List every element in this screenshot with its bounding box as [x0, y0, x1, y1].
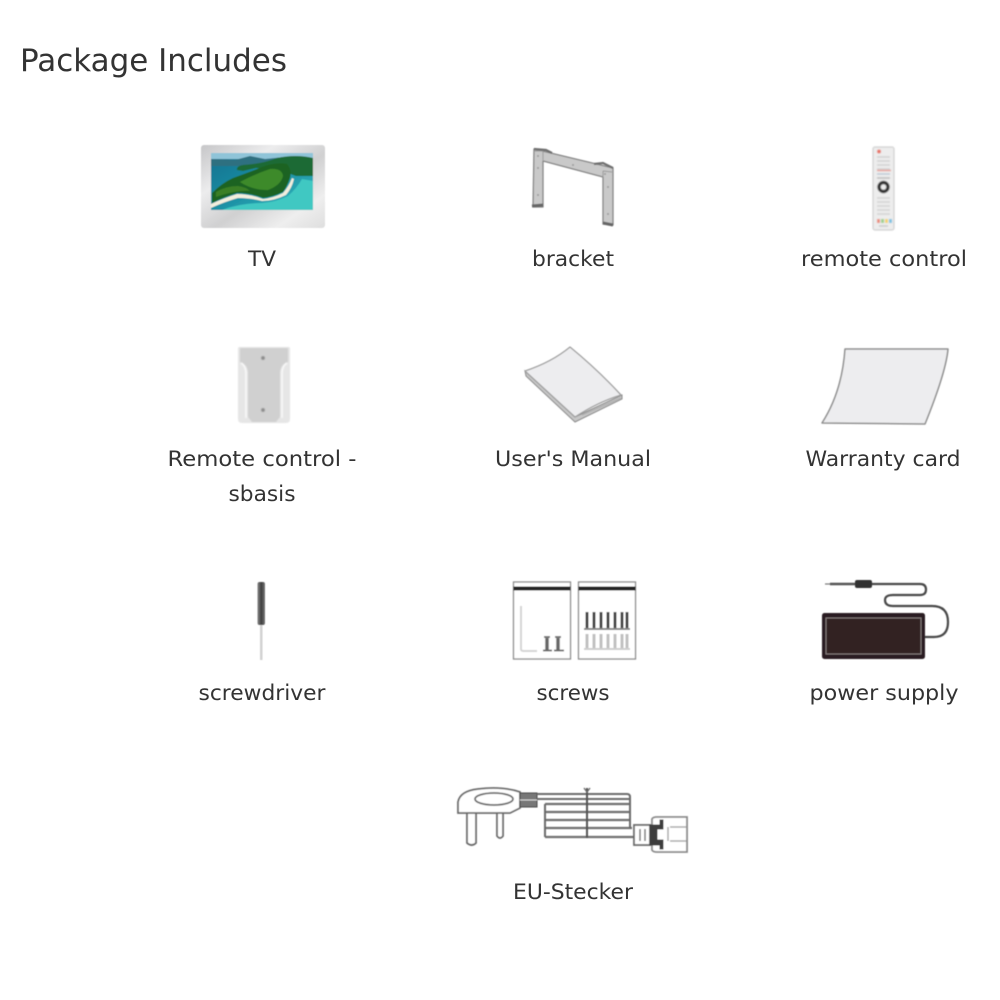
item: TV	[201, 145, 325, 271]
icon: screw bags	[514, 582, 636, 659]
item: user's manual	[495, 347, 651, 471]
item: screws	[514, 582, 636, 705]
item: EU plug cable	[458, 788, 687, 904]
icon: remote control	[873, 147, 894, 230]
label: User's Manual	[495, 447, 651, 471]
item: bracket	[532, 149, 614, 271]
icon: screwdriver	[258, 582, 265, 660]
icon: warranty card	[822, 349, 948, 424]
label: remote control	[801, 247, 967, 271]
label: Warranty card	[806, 447, 960, 471]
label: bracket	[532, 247, 614, 271]
label: EU-Stecker	[513, 880, 633, 904]
label: screws	[536, 681, 610, 705]
label	[168, 447, 356, 506]
label: Remote control -	[168, 447, 356, 471]
title: Package Includes	[20, 43, 287, 79]
icon: bracket	[532, 149, 613, 225]
label: sbasis	[228, 482, 296, 506]
icon: remote control holder	[238, 347, 290, 423]
icon: plug and cable	[458, 788, 687, 852]
icon: manual booklet	[525, 347, 622, 422]
item: remote control	[801, 147, 967, 271]
item: power supply	[810, 580, 958, 705]
label: screwdriver	[198, 681, 326, 705]
item: remote control holder	[168, 347, 356, 506]
icon: power adapter	[822, 580, 948, 659]
item: screwdriver	[198, 582, 326, 705]
label: power supply	[810, 681, 958, 705]
item: warranty card	[806, 349, 960, 471]
label: TV	[247, 247, 277, 271]
icon: TV	[201, 145, 325, 228]
